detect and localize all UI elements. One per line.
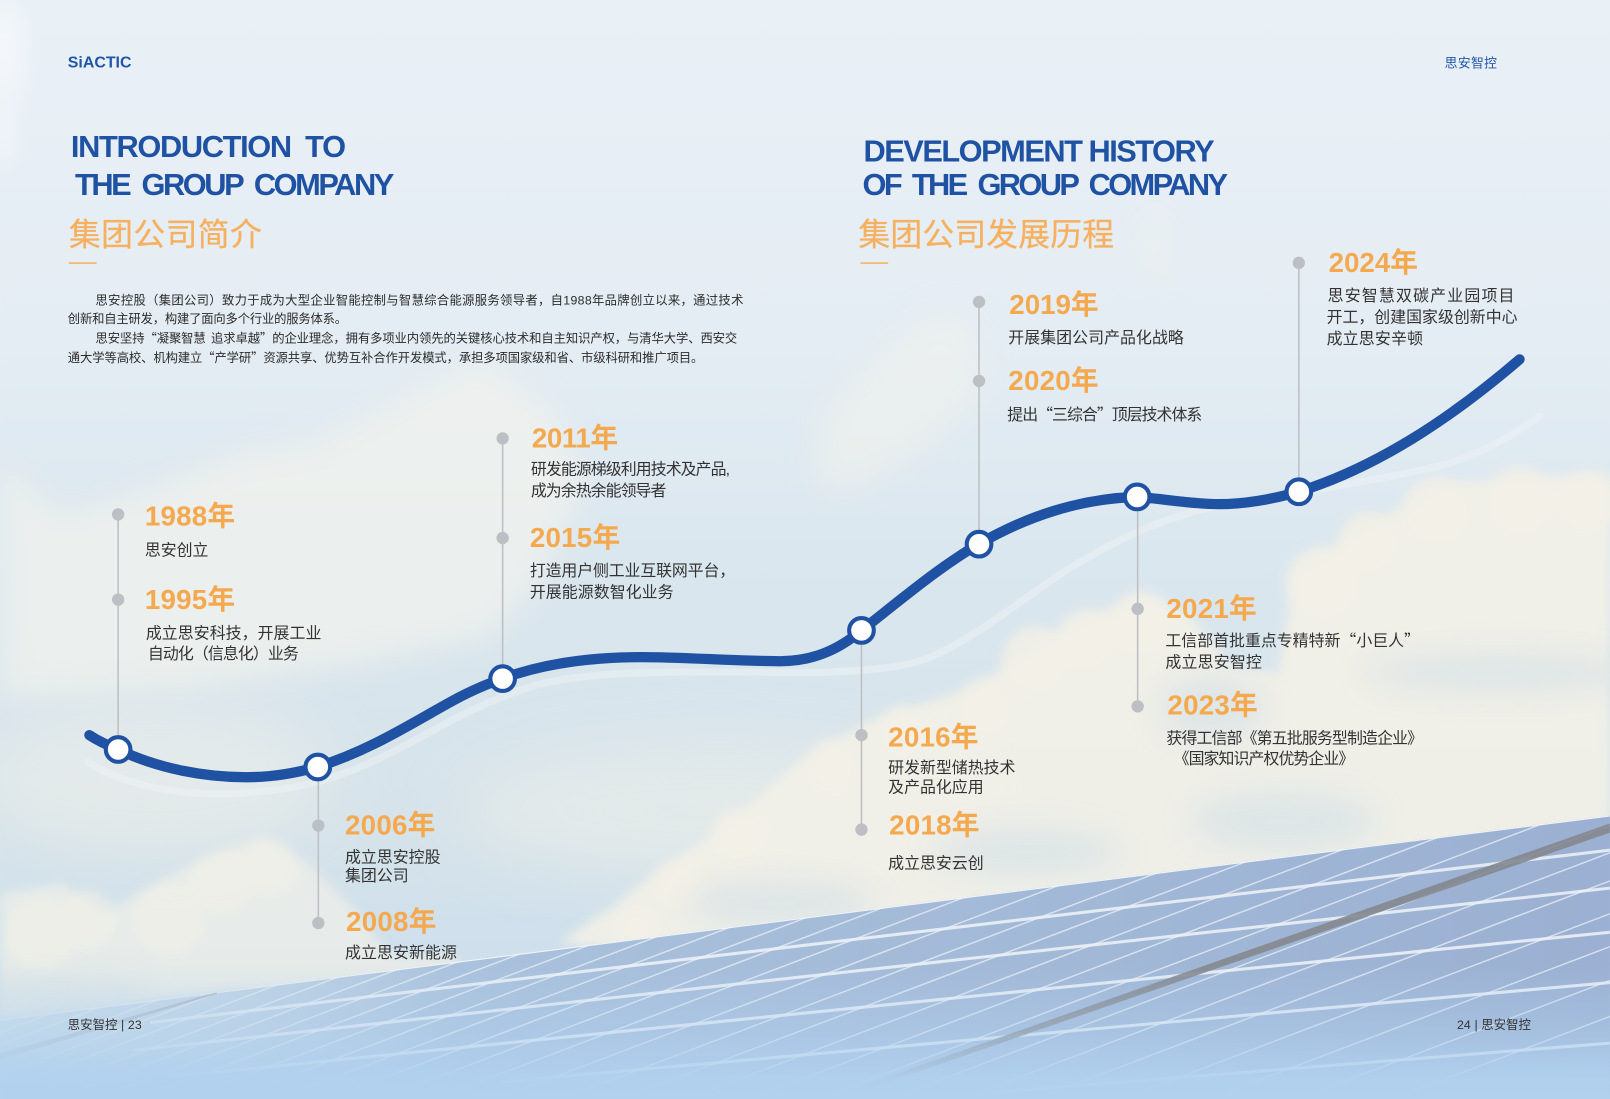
heading: introduction (69, 129, 395, 264)
milestone 2023 (1131, 690, 1423, 768)
milestone 2008: 2008年 (346, 906, 436, 937)
milestone 1995: 1995年 (145, 584, 235, 615)
milestone 2021: 成立思安智控 (1165, 653, 1262, 671)
heading: development history: DEVELOPMENT HISTORY (864, 134, 1215, 169)
milestone 2023: 获得工信部《第五批服务型制造企业》 (1166, 729, 1423, 747)
milestone 2015: 打造用户侧工业互联网平台， (530, 562, 735, 580)
heading: introduction: THE GROUP COMPANY (75, 167, 395, 202)
milestone 2023: 《国家知识产权优势企业》 (1174, 750, 1354, 768)
text block: company introduction (68, 292, 743, 366)
milestone 1988: 1988年 (145, 501, 235, 532)
timeline milestone nodes (106, 479, 1311, 779)
milestone 2016 (855, 721, 1016, 797)
milestone 2020: 2020年 (1008, 365, 1099, 396)
milestone 1995 (112, 584, 321, 663)
milestone 1988: 思安创立 (145, 541, 209, 559)
milestone 1995: 自动化（信息化）业务 (148, 645, 299, 663)
milestone 2023: 2023年 (1167, 690, 1258, 721)
footer right: 24 | 思安智控 (1457, 1017, 1531, 1032)
milestone 2015: 2015年 (530, 522, 620, 553)
text block: company introduction: 思安坚持“凝聚智慧 追求卓越”的企业理念，拥有多项业内领先的关键核心技术和自主知识产权，与清华大学、西安交 (96, 328, 737, 346)
milestone 2024: 2024年 (1329, 247, 1418, 278)
heading: introduction: INTRODUCTION TO (71, 129, 346, 164)
milestone 2008 (312, 906, 457, 962)
milestone 2016: 研发新型储热技术 (888, 759, 1016, 777)
timeline vertical connectors (118, 263, 1299, 923)
milestone 2019: 2019年 (1009, 289, 1099, 320)
milestone 2018 (855, 810, 984, 873)
milestone 2019 (973, 289, 1184, 347)
milestone 2016: 2016年 (888, 721, 979, 752)
milestone 2024: 成立思安辛顿 (1327, 330, 1423, 348)
milestone 2024: 思安智慧双碳产业园项目 (1328, 287, 1514, 305)
milestone 2006: 2006年 (345, 810, 435, 841)
milestone 2020 (973, 365, 1202, 425)
milestone 2016: 及产品化应用 (888, 778, 984, 797)
milestone 2015: 开展能源数智化业务 (530, 584, 674, 602)
text block: company introduction: 创新和自主研发，构建了面向多个行业的服务体系。 (68, 311, 347, 326)
milestone 2011: 成为余热余能领导者 (531, 481, 666, 500)
logo: SiACTIC (68, 55, 132, 72)
text block: company introduction: 通大学等高校、机构建立“产学研”资源共享、优势互补合作开发模式，承担多项国家级和省、市级科研和推广项目。 (68, 348, 703, 366)
header label: 思安智控 (1445, 56, 1497, 71)
timeline light ribbon (87, 416, 1540, 794)
heading: introduction: 集团公司简介 (69, 216, 262, 252)
milestone 2020: 提出“三综合”顶层技术体系 (1007, 402, 1202, 425)
milestone 2024: 开工，创建国家级创新中心 (1327, 308, 1518, 326)
milestone 1988 (112, 501, 235, 559)
milestone 2006: 成立思安控股 (345, 848, 441, 866)
milestone 2018: 2018年 (889, 810, 980, 841)
milestone 2018: 成立思安云创 (888, 855, 984, 873)
heading: development history: OF THE GROUP COMPANY (862, 167, 1228, 202)
milestone 2024 (1293, 247, 1518, 348)
text block: company introduction: 思安控股（集团公司）致力于成为大型企业智能控制与智慧综合能源服务领导者，自1988年品牌创立以来，通过技术 (96, 292, 743, 307)
milestone 2015 (496, 522, 735, 602)
milestone 2019: 开展集团公司产品化战略 (1008, 329, 1184, 347)
background: solar panels (0, 815, 1610, 1099)
milestone 2006 (312, 810, 441, 885)
heading: development history: 集团公司发展历程 (858, 216, 1114, 252)
milestone 2021: 2021年 (1166, 593, 1257, 624)
heading: development history (858, 134, 1228, 264)
timeline curve (89, 359, 1520, 777)
milestone 2021 (1131, 593, 1420, 671)
milestone 1995: 成立思安科技，开展工业 (146, 625, 321, 643)
milestone 2008: 成立思安新能源 (345, 944, 457, 962)
milestone 2011 (496, 423, 730, 500)
milestone 2011: 2011年 (532, 423, 618, 454)
footer left: 思安智控 | 23 (68, 1017, 142, 1032)
milestone 2006: 集团公司 (345, 867, 409, 885)
milestone 2011: 研发能源梯级利用技术及产品, (531, 460, 730, 478)
milestone 2021: 工信部首批重点专精特新“小巨人” (1165, 628, 1420, 651)
